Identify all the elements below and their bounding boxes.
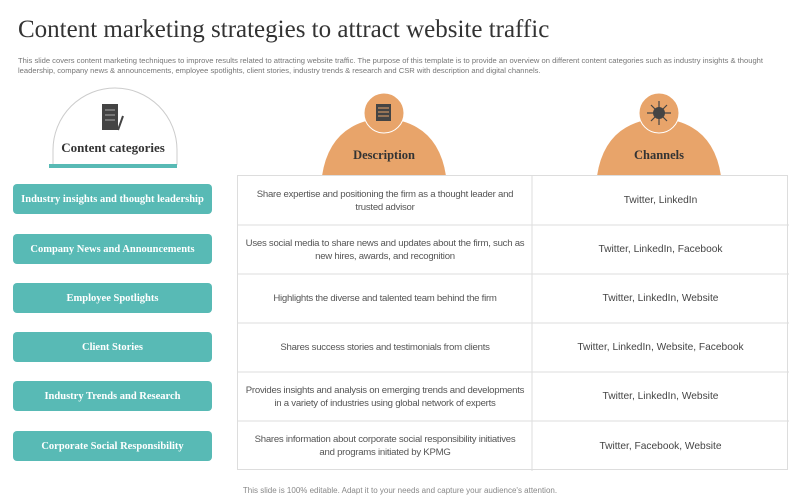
table: Uses social media to share news and updates about the firm, such as: [246, 238, 524, 248]
table: Twitter, LinkedIn: [624, 195, 697, 206]
table: Twitter, LinkedIn, Website, Facebook: [577, 342, 744, 353]
table: Provides insights and analysis on emerging trends and developments: [246, 384, 524, 396]
header: content categories: [49, 88, 177, 168]
category buttons: Corporate Social Responsibility: [41, 440, 184, 452]
category buttons: Employee Spotlights: [67, 292, 158, 304]
table: Twitter, LinkedIn, Facebook: [598, 244, 722, 255]
category buttons: Industry Trends and Research: [44, 390, 181, 402]
category buttons: [13, 184, 212, 461]
table: Shares information about corporate social responsibility initiatives: [255, 434, 515, 445]
table: Shares success stories and testimonials from clients: [280, 342, 490, 353]
category buttons: Client Stories: [82, 342, 143, 352]
table: in a variety of industries using global network of experts: [274, 398, 496, 408]
table: Twitter, LinkedIn, Website: [603, 391, 718, 402]
subtitle: This slide covers content marketing techniques to improve results related to attracting website traffic. The purpose of this template is to provide an overview on different content categories such as industry insights & thought leadership, company news & announcements, employee spotlights, client stories, industry trends & research and CSR with description and digital channels.: [18, 56, 763, 75]
table: Highlights the diverse and talented team behind the firm: [273, 293, 497, 304]
table: Twitter, Facebook, Website: [599, 440, 722, 452]
title: Content marketing strategies to attract website traffic: [18, 16, 549, 43]
header: channels: Channels: [634, 148, 684, 162]
footer: This slide is 100% editable. Adapt it to your needs and capture your audience's attention.: [243, 486, 557, 495]
table: Twitter, LinkedIn, Website: [603, 293, 718, 304]
table: trusted advisor: [355, 202, 415, 212]
header: content categories: Content categories: [61, 140, 165, 155]
header: description: [322, 93, 446, 176]
header: channels: [597, 93, 721, 176]
category buttons: Company News and Announcements: [30, 244, 195, 254]
table: new hires, awards, and recognition: [315, 250, 455, 262]
icon: document: [102, 104, 123, 130]
category buttons: Industry insights and thought leadership: [21, 194, 204, 204]
header: description: Description: [353, 148, 415, 162]
table: Share expertise and positioning the firm as a thought leader and: [257, 188, 513, 200]
table: [237, 175, 788, 470]
table: and programs initiated by KPMG: [319, 447, 451, 458]
header graphics: [49, 88, 721, 175]
